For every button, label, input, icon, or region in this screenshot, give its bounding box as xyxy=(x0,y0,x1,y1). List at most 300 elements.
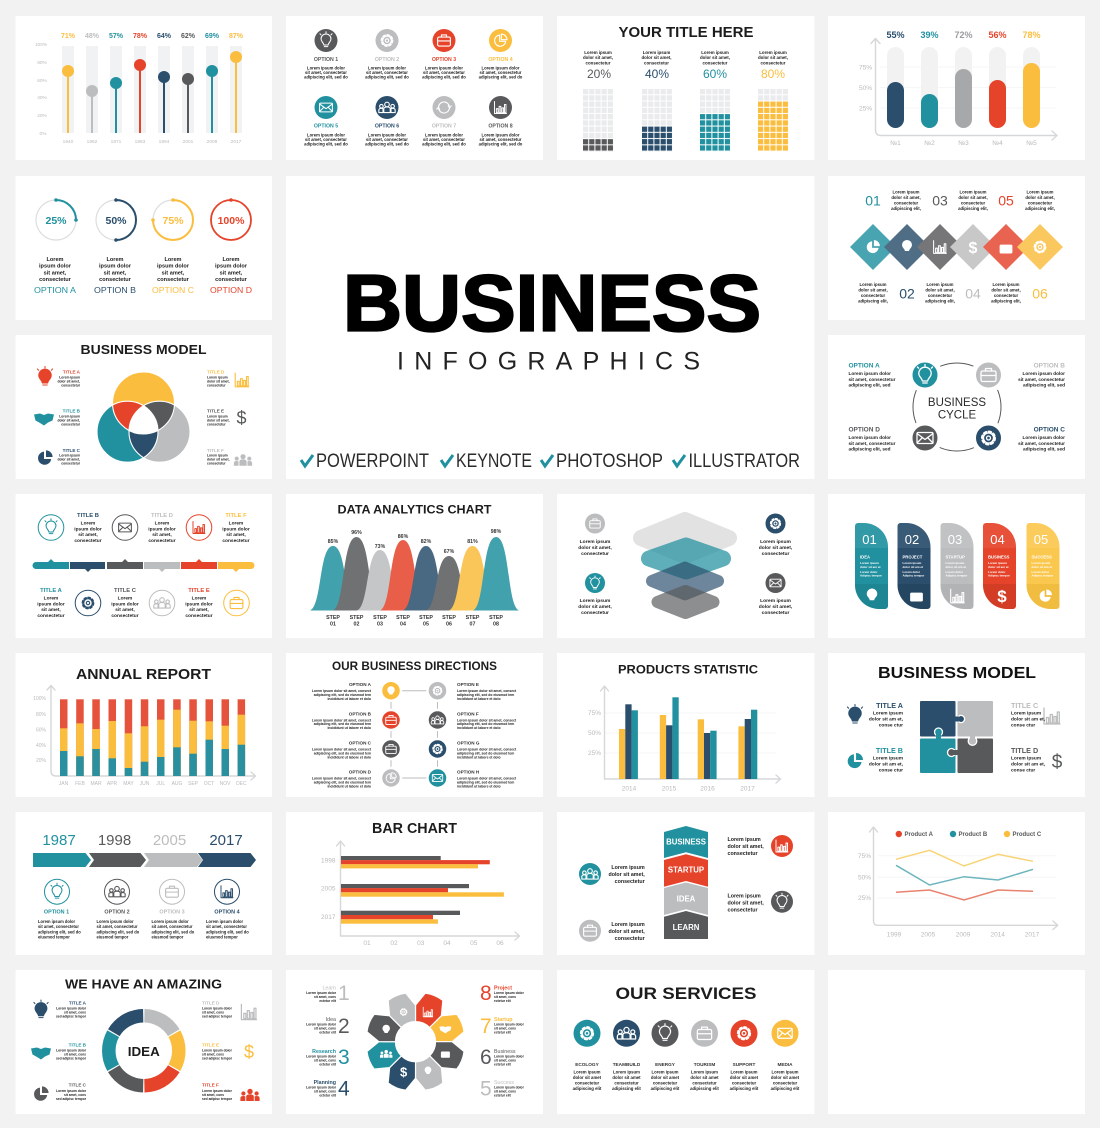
left titles and icons: Lorem ipsum xyxy=(59,376,80,380)
service descriptions: adipiscing elit xyxy=(771,1086,800,1091)
puzzle knob necks xyxy=(936,716,975,755)
percent labels: 78% xyxy=(1022,30,1041,40)
peak labels: 73% xyxy=(375,544,386,550)
panel: empty xyxy=(828,970,1085,1114)
side descriptions: consectetur xyxy=(728,851,758,857)
left option text: incididunt ut labore et dolo xyxy=(327,755,371,759)
circle descriptions: Lorem xyxy=(106,257,124,263)
circle descriptions: consectetur xyxy=(39,277,72,283)
gear icons: $ xyxy=(400,1064,408,1080)
axis labels: 05 xyxy=(470,940,478,947)
legend: Product C xyxy=(1012,832,1042,838)
option titles: OPTION 6 xyxy=(375,124,399,130)
left titles and icons: dolor sit amet, xyxy=(57,418,80,422)
left option text: Lorem ipsum dolor sit amet, consect xyxy=(312,718,372,722)
percentage labels: 57% xyxy=(109,33,124,40)
right titles and icons: dolor sit amet, xyxy=(207,418,230,422)
axis labels: 2014 xyxy=(622,786,637,792)
service descriptions: Lorem ipsum xyxy=(613,1070,640,1074)
title descriptions: dolor sit am et, xyxy=(1011,762,1046,768)
left titles and icons: Lorem ipsum xyxy=(59,454,80,458)
right descriptions: ectetur elit xyxy=(494,999,512,1003)
service descriptions: consectetur xyxy=(575,1080,600,1086)
peak labels: 81% xyxy=(467,539,478,545)
descriptions: consectetur xyxy=(37,613,65,619)
percent labels: 56% xyxy=(988,30,1007,40)
option descriptions: sit amet, consectetur xyxy=(96,924,138,929)
tab 01: Lorem ipsum xyxy=(860,561,879,565)
descriptions: ipsum dolor xyxy=(185,601,213,607)
option descriptions: adipiscing elit, sed do xyxy=(304,74,348,80)
icon: option 4 xyxy=(489,29,512,52)
tab 02: Adipisc tempor xyxy=(902,574,925,578)
right option text: OPTION G xyxy=(457,740,480,746)
title descriptions xyxy=(869,710,1046,774)
axis labels xyxy=(588,710,755,792)
descriptions: ipsum dolor xyxy=(222,526,250,532)
tab 02: Lorem dolor xyxy=(902,570,921,574)
layer stack xyxy=(641,520,729,613)
option titles: OPTION 1 xyxy=(314,57,338,63)
axis labels: 0% xyxy=(40,131,47,137)
option labels xyxy=(44,910,240,916)
title descriptions: Lorem ipsum xyxy=(1011,756,1041,762)
peak labels: 67% xyxy=(444,549,455,555)
service descriptions: Lorem ipsum xyxy=(691,1070,718,1074)
tab 05: Adipisc tempor xyxy=(1032,574,1054,578)
left descriptions: ectetur elit xyxy=(319,999,337,1003)
outlined icons xyxy=(44,879,240,904)
percent labels: 20% xyxy=(587,67,611,81)
descriptions: consectetur xyxy=(148,538,176,544)
group 2017 xyxy=(341,911,460,924)
service descriptions: dolor sit amet xyxy=(730,1075,759,1080)
axis labels: 100% xyxy=(35,42,48,48)
panel: lollipop percentage chart xyxy=(16,16,272,160)
panel: business cycle xyxy=(828,335,1085,479)
step descriptions: Lorem ipsum xyxy=(993,282,1020,287)
left descriptions: ectetur elit xyxy=(319,1062,337,1066)
option descriptions: adipiscing elit, sed do xyxy=(365,74,409,80)
left option text: incididunt ut labore et dolo xyxy=(327,784,371,788)
tab 04: 04 xyxy=(990,532,1005,547)
chevron arrows xyxy=(33,853,256,867)
axis labels: MAY xyxy=(123,781,134,787)
left titles and icons: TITLE B xyxy=(63,408,81,414)
title labels: TITLE B xyxy=(876,746,903,755)
right labels xyxy=(494,986,516,1086)
side descriptions: dolor sit amet, xyxy=(728,844,764,850)
left option text: incididunt ut labore et dolo xyxy=(327,697,371,701)
heading: BAR CHART xyxy=(372,821,457,837)
axis labels: 1971 xyxy=(111,139,122,145)
side descriptions: dolor sit amet, xyxy=(759,604,793,610)
step labels: 07 xyxy=(470,621,475,627)
right numbers: 6 xyxy=(480,1046,492,1069)
right labels: Project xyxy=(494,986,512,992)
step numbers: 05 xyxy=(998,192,1014,208)
axes xyxy=(47,686,256,780)
option descriptions: Lorem ipsum dolor xyxy=(1023,435,1065,440)
tab 01: dolor sit am et xyxy=(860,565,881,569)
right descriptions: sit amet, cons xyxy=(494,1090,516,1094)
side descriptions: dolor sit amet, xyxy=(759,545,793,551)
heading: ANNUAL REPORT xyxy=(76,666,211,683)
option descriptions: adipiscing elit, sed do xyxy=(152,929,195,934)
option titles: OPTION 5 xyxy=(314,124,338,130)
right titles and icons: Lorem ipsum xyxy=(207,376,228,380)
option descriptions: adipiscing elit, sed xyxy=(848,447,891,452)
right titles and icons: consectetur xyxy=(207,462,226,466)
axis labels: 2017 xyxy=(1025,931,1040,938)
left numbers: 3 xyxy=(338,1046,350,1069)
left descriptions xyxy=(306,991,337,1098)
axis labels: 40% xyxy=(37,95,48,101)
left descriptions: Lorem ipsum dolor xyxy=(306,1022,337,1026)
icon: option 5 xyxy=(314,96,338,119)
side descriptions: consectetur xyxy=(615,936,645,942)
service descriptions: Lorem ipsum xyxy=(731,1070,758,1074)
tab 01: 01 xyxy=(862,532,877,547)
learn arrow xyxy=(664,911,708,939)
axis labels: 25% xyxy=(859,106,872,112)
side descriptions: dolor sit amet, xyxy=(608,872,645,878)
axis labels: 50% xyxy=(858,874,871,882)
service descriptions: adipiscing elit xyxy=(651,1086,680,1091)
puzzle knobs xyxy=(934,715,977,756)
tab 03: dolor sit am et xyxy=(946,565,966,569)
panel: product line chart xyxy=(828,812,1085,955)
descriptions: Lorem xyxy=(81,520,95,526)
right option text: Lorem ipsum dolor sit amet, consect xyxy=(457,689,517,693)
progress circle 75 percent xyxy=(151,198,193,240)
left titles and icons: consectetur xyxy=(61,422,81,426)
left labels: Learn xyxy=(322,986,336,992)
axis labels: №3 xyxy=(958,140,969,147)
left option text: adipiscing elit, sed do eiusmod tem xyxy=(314,722,371,726)
axis labels: 1983 xyxy=(135,139,146,145)
titles: TITLE C xyxy=(114,588,137,594)
option descriptions: Lorem ipsum dolor xyxy=(307,66,345,70)
left option text xyxy=(312,682,372,788)
option descriptions: sit amet, consectetur xyxy=(152,924,193,929)
descriptions: consectetur xyxy=(111,613,139,619)
tab 03: Adipisc tempor xyxy=(946,574,968,578)
cycle label: CYCLE xyxy=(938,410,976,422)
axis labels: OCT xyxy=(204,781,214,787)
cycle ring xyxy=(913,363,1001,451)
left descriptions: Lorem ipsum dolor xyxy=(306,991,337,995)
diamonds xyxy=(850,224,1063,270)
step labels: 02 xyxy=(354,621,359,627)
step descriptions: dolor sit amet, xyxy=(991,288,1021,292)
option descriptions: sit amet, consectetur xyxy=(206,924,247,929)
axis labels: 60% xyxy=(36,728,47,734)
right titles and icons: consectetur xyxy=(207,384,226,388)
step descriptions: consectetur xyxy=(961,200,986,206)
tab 04: $ xyxy=(997,587,1007,606)
column values xyxy=(887,63,1040,128)
step numbers: 01 xyxy=(865,192,881,208)
service titles: TEAMBUILD xyxy=(613,1062,641,1067)
left titles and icons: TITLE C xyxy=(69,1082,87,1088)
column descriptions: dolor sit amet, xyxy=(583,55,613,60)
side descriptions: consectetur xyxy=(762,610,789,616)
service titles: ENERGY xyxy=(655,1062,676,1067)
service descriptions: adipiscing elit xyxy=(573,1086,602,1091)
column descriptions: Lorem ipsum xyxy=(643,50,670,55)
option descriptions: adipiscing elit, sed xyxy=(1023,447,1065,452)
step labels: STEP xyxy=(419,615,433,621)
side descriptions: consectetur xyxy=(581,610,609,616)
cycle icons xyxy=(910,360,1004,453)
option descriptions: Lorem ipsum dolor xyxy=(307,132,345,138)
service descriptions: dolor sit amet xyxy=(651,1075,680,1080)
option titles: OPTION C xyxy=(1034,426,1065,434)
circle descriptions: ipsum dolor xyxy=(39,264,72,270)
step descriptions: dolor sit amet, xyxy=(958,195,988,200)
right titles and icons: sit amet, cons xyxy=(202,1052,224,1056)
left labels: Planning xyxy=(314,1080,336,1086)
right descriptions: sit amet, cons xyxy=(494,1026,516,1030)
right option text: OPTION H xyxy=(457,770,480,775)
descriptions: ipsum dolor xyxy=(148,526,176,532)
axis labels: 03 xyxy=(417,940,425,947)
option descriptions: Lorem ipsum dolor xyxy=(425,132,463,138)
option descriptions: Lorem ipsum dolor xyxy=(482,132,520,138)
right option text: OPTION F xyxy=(457,711,479,716)
service titles: SUPPORT xyxy=(733,1062,755,1067)
option descriptions: Lorem ipsum dolor xyxy=(206,919,243,924)
descriptions: Lorem xyxy=(44,596,58,602)
left option text: OPTION A xyxy=(349,682,372,687)
left titles and icons: sit amet, cons xyxy=(64,1010,86,1014)
group 1998 xyxy=(341,856,490,868)
axis labels xyxy=(33,696,247,787)
left numbers: 2 xyxy=(338,1015,350,1038)
step descriptions: consectetur xyxy=(861,293,886,298)
service descriptions: dolor sit amet xyxy=(573,1075,602,1080)
option descriptions: eiusmod tempor xyxy=(38,935,70,940)
right titles and icons: sed adipisc tempor xyxy=(202,1056,233,1060)
column descriptions: dolor sit amet, xyxy=(641,55,672,60)
circle descriptions: Lorem xyxy=(46,257,64,263)
axis labels xyxy=(35,42,242,145)
right titles and icons: sit amet, cons xyxy=(202,1010,224,1014)
left titles and icons: sed adipisc tempor xyxy=(56,1014,87,1018)
column descriptions: Lorem ipsum xyxy=(701,50,729,55)
column descriptions: consectetur xyxy=(586,60,611,65)
startup arrow xyxy=(664,854,708,887)
right option text xyxy=(457,682,517,788)
titles: TITLE E xyxy=(188,588,210,594)
left descriptions: sit amet, cons xyxy=(314,1026,336,1030)
left titles and icons: consectetur xyxy=(61,384,81,388)
yellow bars xyxy=(619,715,745,779)
axis labels: №5 xyxy=(1026,140,1037,147)
axis labels: 2015 xyxy=(662,786,677,792)
column descriptions xyxy=(583,50,788,65)
step descriptions: consectetur xyxy=(1028,200,1053,206)
tab 05: 05 xyxy=(1034,532,1048,547)
venn diagram xyxy=(97,372,190,462)
left labels xyxy=(312,986,336,1086)
percentage labels: 78% xyxy=(133,33,148,40)
tab 03: 03 xyxy=(948,532,962,547)
side descriptions: consectetur xyxy=(728,907,758,913)
step numbers xyxy=(865,192,1048,302)
left labels: Research xyxy=(312,1049,336,1055)
left descriptions: ectetur elit xyxy=(319,1094,337,1098)
right option text: incididunt ut labore et dolo xyxy=(457,726,501,730)
panel: central business infographics title xyxy=(286,176,814,479)
right option text: adipiscing elit, sed do eiusmod tem xyxy=(457,722,514,726)
left titles and icons: TITLE A xyxy=(63,370,81,374)
step descriptions: consectetur xyxy=(928,293,953,298)
title labels: TITLE A xyxy=(876,701,903,710)
titles: TITLE D xyxy=(151,513,173,519)
descriptions: Lorem xyxy=(229,520,243,526)
panel: timeline chevrons xyxy=(16,812,272,955)
tab 01: Lorem dolor xyxy=(860,570,878,574)
option descriptions: Lorem ipsum dolor xyxy=(425,66,463,70)
service descriptions: consectetur xyxy=(653,1080,678,1086)
option descriptions: Lorem ipsum dolor xyxy=(96,919,134,924)
option descriptions: adipiscing elit, sed do xyxy=(206,929,249,934)
side descriptions: Lorem ipsum xyxy=(580,539,611,545)
side descriptions: consectetur xyxy=(762,551,789,557)
tab 02: dolor sit am et xyxy=(902,565,923,569)
right descriptions: Lorem ipsum dolor xyxy=(494,1086,525,1090)
right titles and icons: Lorem ipsum xyxy=(207,454,228,458)
right option text: incididunt ut labore et dolo xyxy=(457,755,501,759)
step labels: STEP xyxy=(396,615,410,621)
axis labels: 60% xyxy=(37,78,48,84)
axis labels: 2017 xyxy=(321,914,336,921)
peak labels: 86% xyxy=(398,534,409,540)
option labels: OPTION C xyxy=(152,285,194,295)
right descriptions: Lorem ipsum dolor xyxy=(494,991,525,995)
right descriptions: Lorem ipsum dolor xyxy=(494,1054,525,1058)
tab 02 xyxy=(898,523,930,609)
axis labels: AUG xyxy=(172,781,183,787)
descriptions xyxy=(37,520,250,619)
step labels: STEP xyxy=(466,615,480,621)
left titles and icons: TITLE A xyxy=(69,1000,87,1006)
side descriptions: Lorem ipsum xyxy=(760,598,791,604)
axis labels: 2017 xyxy=(740,786,755,792)
option descriptions: Lorem ipsum dolor xyxy=(368,132,406,138)
service descriptions: consectetur xyxy=(614,1080,639,1086)
option descriptions: adipiscing elit, sed xyxy=(1023,383,1065,388)
title descriptions: conse ctur xyxy=(879,722,903,728)
main title: BUSINESS xyxy=(343,258,761,348)
panel: diamond sequence xyxy=(828,176,1085,320)
step descriptions: Lorem ipsum xyxy=(960,190,987,194)
option descriptions: sit amet, consectetur xyxy=(848,441,896,446)
left titles and icons xyxy=(34,366,81,466)
service titles xyxy=(575,1062,793,1067)
option titles: OPTION 2 xyxy=(375,57,399,63)
option descriptions: sit amet, consectetur xyxy=(1018,441,1065,446)
axis labels: 2009 xyxy=(207,139,218,145)
option descriptions: adipiscing elit, sed do xyxy=(479,74,523,80)
circle descriptions: sit amet, xyxy=(44,270,67,276)
heading: DATA ANALYTICS CHART xyxy=(338,502,492,516)
side descriptions xyxy=(578,539,793,616)
panel: horizontal bar chart xyxy=(286,812,543,955)
software list: ILLUSTRATOR xyxy=(688,451,800,472)
tab 05: dolor sit am et xyxy=(1032,565,1052,569)
panel: stacked layers xyxy=(557,494,814,638)
software list: POWERPOINT xyxy=(316,451,429,472)
waffle grid 40 percent xyxy=(642,89,673,152)
peak labels xyxy=(328,529,502,555)
step labels: 06 xyxy=(446,621,452,627)
right titles and icons: TITLE D xyxy=(202,1000,220,1006)
left option text: Lorem ipsum dolor sit amet, consect xyxy=(312,748,372,752)
line: product B xyxy=(896,865,1033,885)
right titles and icons: TITLE E xyxy=(207,408,224,414)
years: 2017 xyxy=(209,832,243,849)
option labels: OPTION B xyxy=(94,285,136,295)
descriptions: sit amet, xyxy=(115,607,135,613)
group 2005 xyxy=(341,884,504,897)
option descriptions: Lorem ipsum dolor xyxy=(152,919,189,924)
option titles xyxy=(314,57,513,130)
option descriptions: sit amet, consectetur xyxy=(423,137,465,142)
circle descriptions: Lorem xyxy=(164,257,182,263)
option descriptions: eiusmod tempor xyxy=(206,935,238,940)
descriptions: sit amet, xyxy=(41,607,61,613)
right option text: incididunt ut labore et dolo xyxy=(457,784,501,788)
legend: Product A xyxy=(904,832,934,838)
gear segments xyxy=(364,990,467,1093)
left titles and icons: Lorem ipsum dolor xyxy=(56,1048,87,1052)
axis labels: DEC xyxy=(236,781,247,787)
descriptions: ipsum dolor xyxy=(111,601,139,607)
axis labels: MAR xyxy=(90,781,102,787)
column descriptions: Lorem ipsum xyxy=(759,50,787,55)
circle descriptions xyxy=(39,257,248,283)
peak labels: 98% xyxy=(491,529,502,535)
option descriptions: adipiscing elit, sed do xyxy=(479,142,523,146)
right titles and icons: Lorem ipsum dolor xyxy=(202,1048,233,1052)
circle descriptions: ipsum dolor xyxy=(157,264,190,270)
waffle grid 60 percent xyxy=(700,89,731,152)
option labels: OPTION D xyxy=(210,285,252,295)
tab 05: Lorem ipsum xyxy=(1032,561,1051,565)
left titles and icons: sed adipisc tempor xyxy=(56,1097,87,1101)
step labels: 03 xyxy=(377,621,383,627)
right titles and icons: Lorem ipsum dolor xyxy=(202,1089,233,1093)
years: 2005 xyxy=(153,832,186,849)
panel: our business directions xyxy=(286,653,543,797)
left option text: OPTION B xyxy=(349,711,372,716)
axis labels: 80% xyxy=(36,712,47,718)
axis labels: JUN xyxy=(140,781,150,787)
side icons xyxy=(585,514,786,593)
service icons xyxy=(574,1020,798,1047)
right titles and icons: sit amet, cons xyxy=(202,1093,224,1097)
line: product C xyxy=(896,850,1033,866)
percent labels: 39% xyxy=(920,30,939,40)
service descriptions: consectetur xyxy=(692,1080,717,1086)
step descriptions: adipiscing elit, xyxy=(891,206,921,211)
gear icons xyxy=(380,1007,451,1080)
left titles and icons: Lorem ipsum dolor xyxy=(56,1006,87,1010)
descriptions: consectetur xyxy=(222,538,250,544)
